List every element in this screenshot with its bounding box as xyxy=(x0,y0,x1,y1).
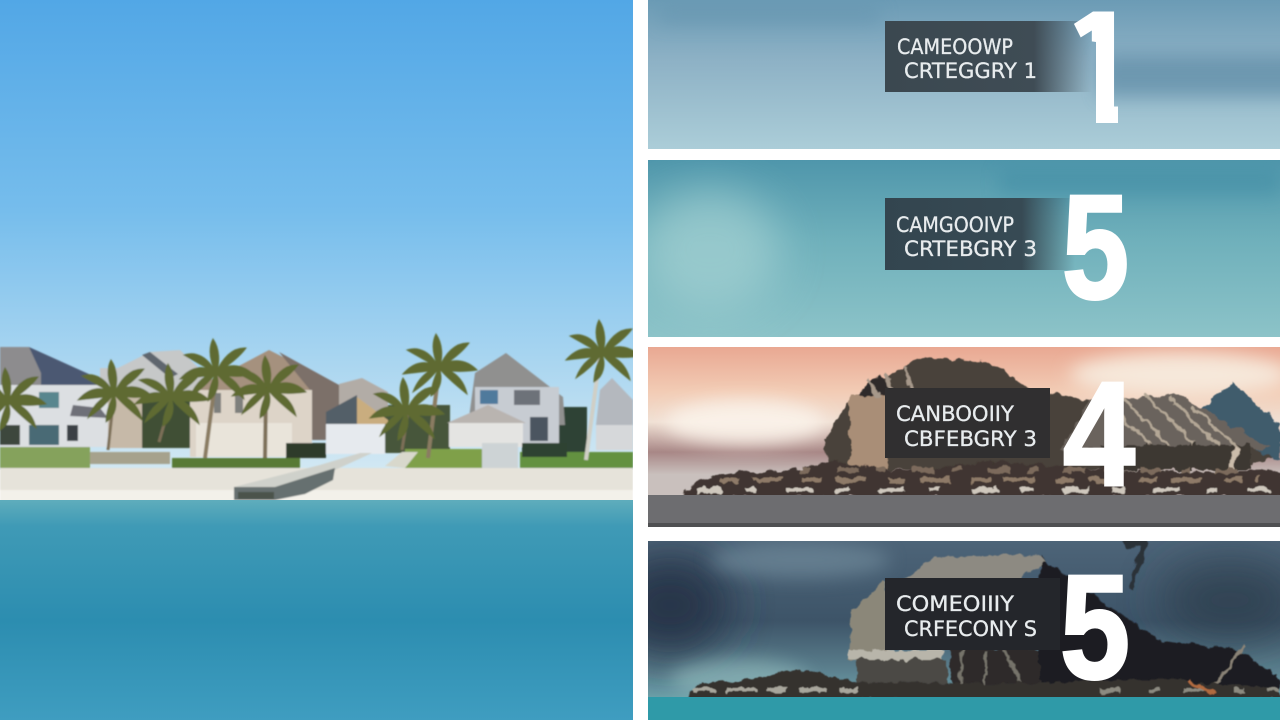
dock xyxy=(234,453,372,500)
panel: category 4 xyxy=(648,347,1280,527)
ruined house xyxy=(848,541,1280,690)
beach xyxy=(0,466,633,490)
label plate xyxy=(885,21,1092,92)
label plate: CAMEOOWP xyxy=(897,35,1013,59)
storm sky background xyxy=(610,541,1280,701)
label plate xyxy=(885,578,1060,650)
debris pile xyxy=(688,668,1280,697)
debris pile xyxy=(683,462,1280,497)
label plate xyxy=(885,198,1075,270)
label plate: CRTEGGRY 1 xyxy=(904,59,1037,83)
label plate: CRTEBGRY 3 xyxy=(904,237,1037,261)
palm trees xyxy=(0,320,640,460)
label plate: CANBOOIIY xyxy=(896,402,1014,426)
panel: calm coastal scene xyxy=(0,0,640,720)
number 5: 5 xyxy=(1062,165,1129,330)
turquoise water xyxy=(648,697,1280,720)
label plate: CRFECONY S xyxy=(904,617,1037,641)
number 5: 5 xyxy=(1060,545,1130,710)
panel: category 1 xyxy=(648,0,1280,158)
row of waterfront houses xyxy=(0,320,640,501)
panel: category 5 xyxy=(610,541,1280,720)
lawns and shrubs xyxy=(0,443,633,471)
panel: category 3 xyxy=(640,160,1280,337)
sky xyxy=(0,0,633,470)
number 4: 4 xyxy=(1063,352,1135,517)
overcast sky background xyxy=(648,0,1280,149)
teal sky background xyxy=(640,160,1280,337)
ruined house xyxy=(825,358,1280,480)
label plate: COMEOIIIY xyxy=(896,592,1014,616)
label plate: CBFEBGRY 3 xyxy=(904,427,1037,451)
sunset sky background xyxy=(648,347,1280,497)
label plate: CAMGOOIVP xyxy=(896,213,1014,237)
road xyxy=(648,495,1280,527)
front steps xyxy=(482,443,518,470)
water xyxy=(0,500,633,720)
label plate xyxy=(885,388,1050,458)
